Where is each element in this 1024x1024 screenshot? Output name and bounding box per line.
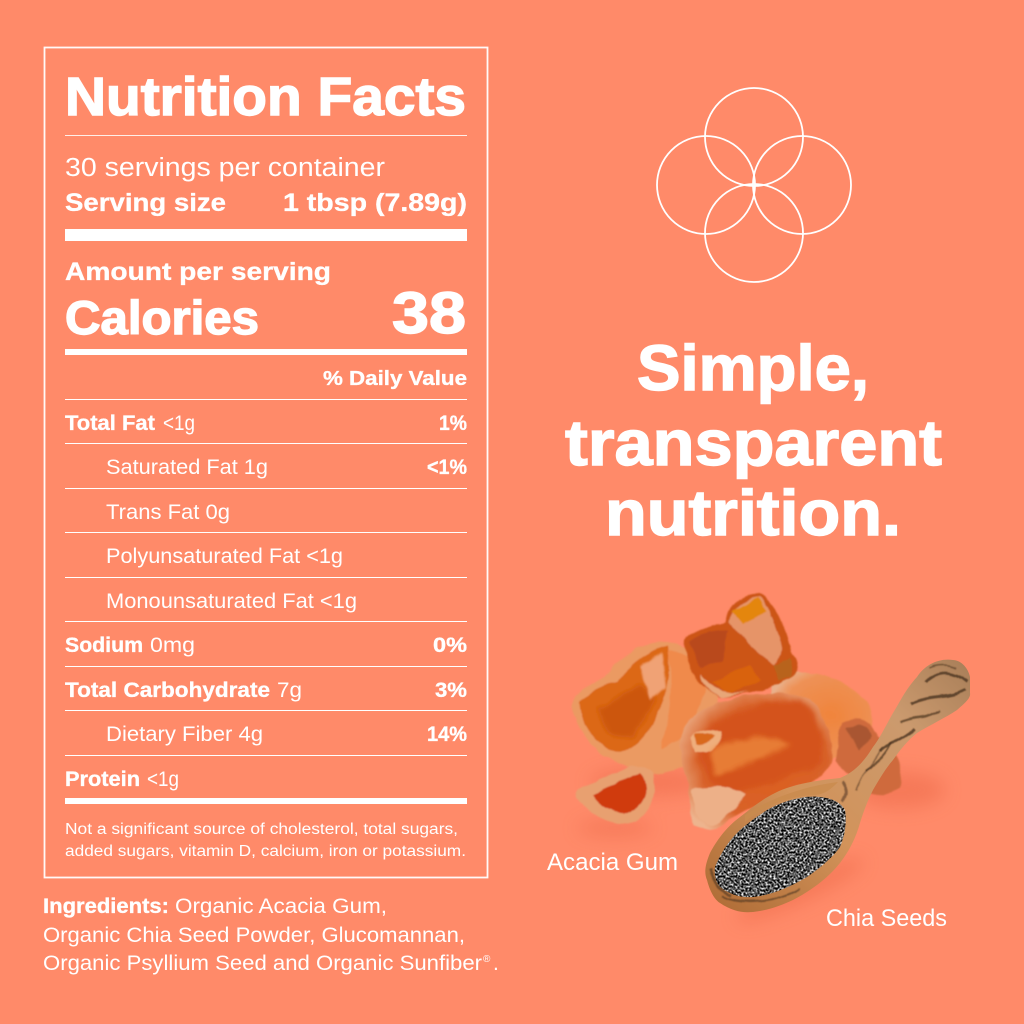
headline: nutrition. [605, 477, 901, 549]
ingredients text [43, 895, 499, 975]
row: dietary fiber: Dietary Fiber 4g [106, 723, 263, 746]
footnote [65, 821, 466, 860]
row: total fat: 1% [439, 412, 467, 435]
row: dietary fiber [106, 723, 467, 746]
row: total fat: Total Fat [65, 412, 155, 435]
icon: large left gum piece [572, 642, 722, 774]
row: sodium [65, 634, 467, 657]
panel: nutrition facts label [44, 48, 488, 878]
row: total carbohydrate [65, 679, 467, 702]
row: sodium: 0% [433, 634, 467, 657]
label frame [44, 48, 488, 878]
row: dietary fiber: 14% [427, 723, 467, 746]
row: polyunsaturated fat: Polyunsaturated Fat <1g [106, 545, 343, 568]
footnote: added sugars, vitamin D, calcium, iron or potassium. [65, 843, 466, 860]
row: protein [65, 768, 179, 791]
heading: Nutrition Facts: Nutrition Facts [65, 67, 466, 127]
icon: wooden spoon [705, 660, 970, 912]
icon: four overlapping circles [657, 88, 851, 282]
illustration: acacia gum and chia spoon [572, 594, 970, 930]
row: monounsaturated fat: Monounsaturated Fat <1g [106, 590, 357, 613]
amount per serving: Amount per serving [65, 258, 331, 286]
headline [565, 332, 942, 549]
daily value header: % Daily Value [323, 368, 467, 390]
row: trans fat: Trans Fat 0g [106, 501, 230, 524]
icon: top gum piece [685, 594, 797, 698]
serving size: Serving size [65, 189, 226, 217]
row: sodium: 0mg [150, 634, 195, 657]
row: total fat [65, 412, 467, 435]
icon: small gum piece [576, 765, 655, 823]
icon: center gum piece [680, 693, 832, 828]
row: total carbohydrate: Total Carbohydrate [65, 679, 270, 702]
ingredients text: . [493, 952, 499, 975]
calories: Calories [65, 291, 259, 344]
ingredients text: ® [483, 954, 491, 965]
row: total carbohydrate: 7g [277, 679, 302, 702]
ingredients text: Organic Acacia Gum, [175, 895, 387, 918]
row: total fat: <1g [163, 412, 195, 435]
row: total carbohydrate: 3% [435, 679, 467, 702]
calories: 38 [392, 281, 466, 346]
serving size [65, 189, 467, 217]
ingredients text: Ingredients: [43, 895, 169, 918]
headline: transparent [565, 407, 942, 479]
calories [65, 281, 466, 346]
row: saturated fat: Saturated Fat 1g [106, 456, 268, 479]
row: protein: Protein [65, 768, 140, 791]
soft shadows [577, 768, 945, 930]
label: Acacia Gum: Acacia Gum [547, 849, 678, 876]
row: sodium: Sodium [65, 634, 143, 657]
servings per container: 30 servings per container [65, 154, 386, 182]
ingredients text: Organic Psyllium Seed and Organic Sunfiber [43, 952, 482, 975]
row: protein: <1g [147, 768, 179, 791]
footnote: Not a significant source of cholesterol, total sugars, [65, 821, 458, 838]
row: saturated fat: <1% [427, 456, 467, 479]
headline: Simple, [637, 332, 869, 404]
label: Chia Seeds: Chia Seeds [826, 905, 947, 932]
chia seeds [715, 797, 846, 897]
icon: back gum pieces [770, 670, 902, 794]
serving size: 1 tbsp (7.89g) [283, 189, 467, 217]
row: saturated fat [106, 456, 467, 479]
ingredients text: Organic Chia Seed Powder, Glucomannan, [43, 924, 465, 947]
